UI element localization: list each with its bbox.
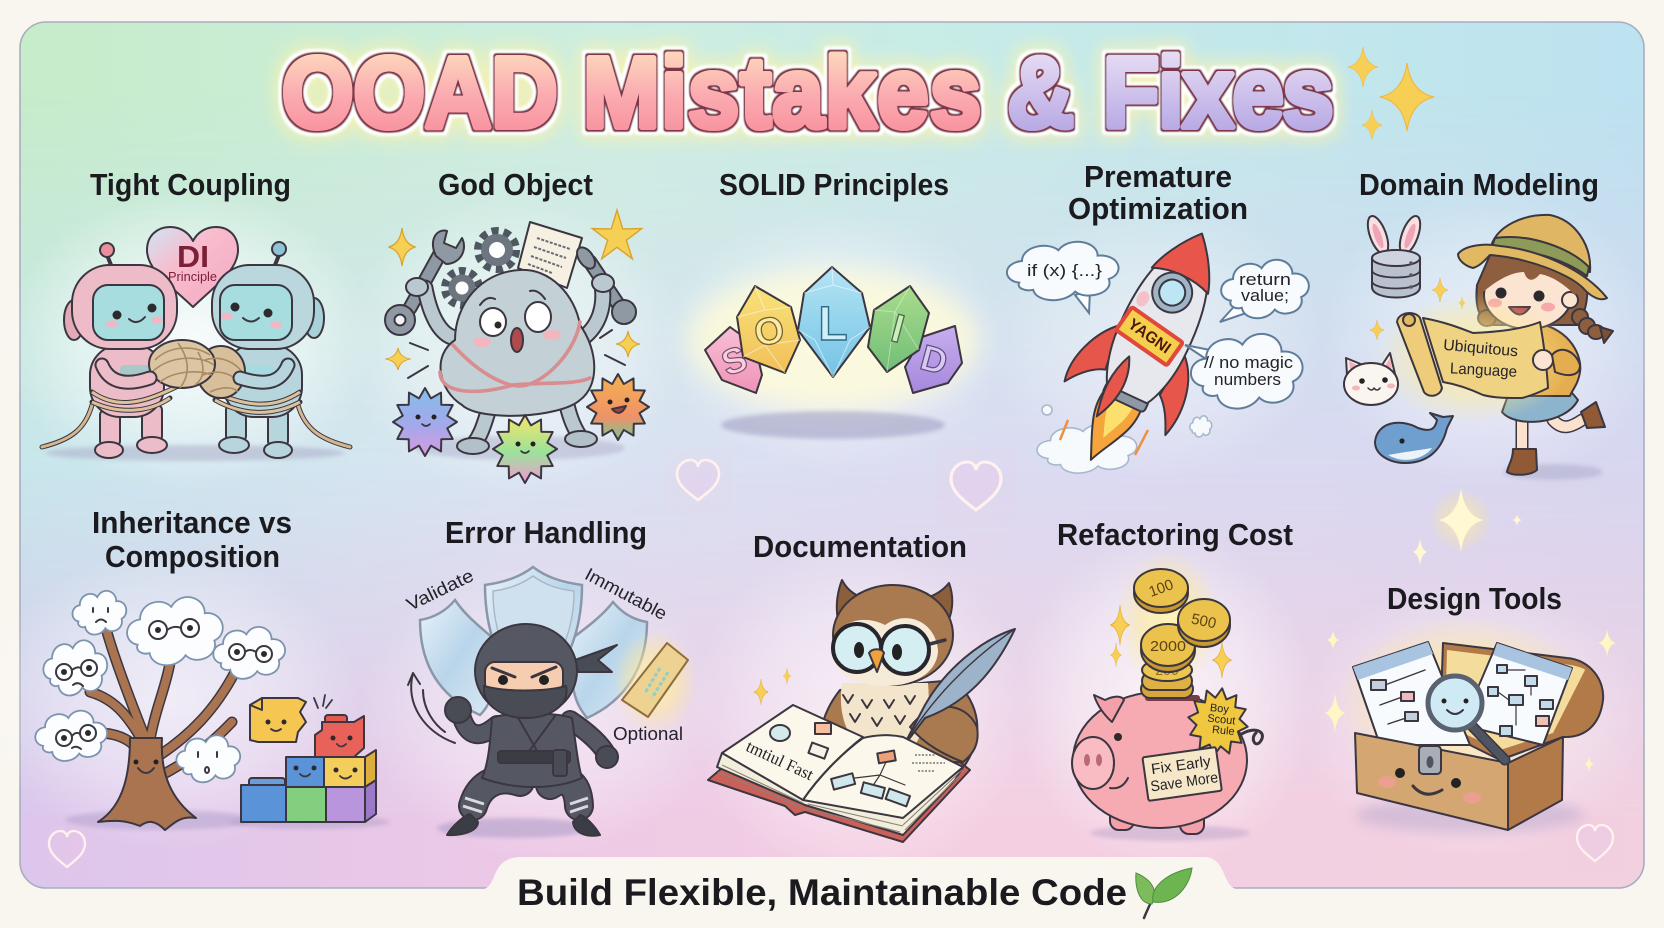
pig body xyxy=(1072,692,1247,834)
left robot legs and torso xyxy=(90,345,167,458)
illustration: tied robots with DI heart xyxy=(42,227,350,461)
jacket xyxy=(1510,325,1580,396)
golden scroll: Ubiquitous Language xyxy=(1375,293,1575,423)
coin 2000: 2000 xyxy=(1150,638,1186,655)
gem S: S xyxy=(716,337,752,384)
illustration: ninja with shields xyxy=(403,564,697,838)
gem O xyxy=(737,286,800,373)
robot arms xyxy=(102,365,288,382)
arms and legs xyxy=(425,285,603,444)
icon: decorative glowing hearts xyxy=(49,460,1613,867)
coin stack: 200 xyxy=(1155,662,1179,678)
coin 500 xyxy=(1178,599,1230,647)
heading: Documentation: Documentation xyxy=(753,529,967,564)
chest face xyxy=(1378,768,1481,804)
ninja head xyxy=(475,624,617,718)
speech cloud: if (x): if (x) {...} xyxy=(1027,261,1102,280)
icon: chest sparkles xyxy=(1325,629,1616,772)
icon: sparkles around scroll xyxy=(1370,278,1465,340)
icon: decorative glowing sparkles xyxy=(1413,488,1522,566)
rainbow monster xyxy=(493,415,557,483)
yellow block xyxy=(250,698,306,742)
chest clasp xyxy=(1419,746,1441,774)
heart with DI Principle: Principle xyxy=(168,269,217,284)
left wrench xyxy=(385,231,464,335)
heart with DI Principle: DI xyxy=(177,239,209,274)
owl wing xyxy=(910,707,978,762)
gem D xyxy=(905,326,962,393)
label: Validate: Validate xyxy=(403,565,477,615)
illustration: owl writing in book xyxy=(708,580,1015,842)
icon: green leaf xyxy=(1136,868,1192,918)
legs and boots xyxy=(1522,420,1582,452)
heading: Domain Modeling: Domain Modeling xyxy=(1359,167,1599,202)
blob body xyxy=(441,270,594,416)
magnifier with face xyxy=(1428,676,1505,760)
speech cloud: return value: value; xyxy=(1241,286,1289,305)
coin 100: 100 xyxy=(1147,576,1176,601)
explorer hat xyxy=(1458,215,1607,299)
coin 2000 xyxy=(1141,624,1195,672)
shields xyxy=(420,567,647,718)
Fix Early Save More label: Fix Early xyxy=(1150,753,1212,778)
gem O: O xyxy=(751,309,788,355)
tail xyxy=(1240,730,1262,744)
icon: book sparkles xyxy=(754,668,791,705)
open book xyxy=(708,705,970,842)
Boy Scout Rule badge: Rule xyxy=(1211,724,1235,738)
right robot legs and torso xyxy=(219,345,302,458)
tree clouds with faces xyxy=(35,591,285,782)
golden scroll: Ubiquitous Language: Ubiquitous xyxy=(1443,337,1519,360)
feather xyxy=(903,629,1015,747)
owl head xyxy=(832,580,953,686)
heading: Inheritance vs Composition xyxy=(92,505,292,574)
middle row blocks xyxy=(286,750,376,787)
gem L: L xyxy=(818,298,848,351)
orange monster xyxy=(587,374,649,440)
icon: cat xyxy=(1344,353,1398,405)
footer text: Build Flexible, Maintainable Code xyxy=(517,872,1127,913)
bottom row blocks xyxy=(241,778,376,822)
illustration: explorer girl with domain scroll xyxy=(1344,213,1613,480)
Fix Early Save More label xyxy=(1142,747,1222,801)
chest box xyxy=(1508,737,1563,830)
skirt xyxy=(1502,388,1578,422)
speech cloud: if (x) xyxy=(1007,242,1119,313)
gem I: I xyxy=(887,306,909,352)
coin 500: 500 xyxy=(1190,611,1218,632)
illustration: SOLID gems xyxy=(688,267,978,439)
heading: Premature Optimization: Optimization xyxy=(1068,191,1248,226)
right wrench xyxy=(573,244,636,324)
scroll glow: Optional xyxy=(613,630,697,734)
heart with DI Principle xyxy=(147,227,238,307)
coin stack xyxy=(1141,659,1193,698)
icon: swoosh arrow xyxy=(408,673,455,743)
ninja legs and feet xyxy=(473,779,579,806)
red block xyxy=(315,715,364,757)
exhaust cloud xyxy=(1037,405,1212,473)
gem D: D xyxy=(916,336,952,383)
icon: right burst star xyxy=(592,210,642,259)
Boy Scout Rule badge: Boy xyxy=(1209,702,1230,716)
heading: Premature Optimization: Premature xyxy=(1084,159,1232,194)
icon: gears xyxy=(445,231,516,305)
owl body xyxy=(820,680,977,765)
Fix Early Save More label: Save More xyxy=(1149,769,1219,795)
open book: tmtiul Fast xyxy=(743,737,817,784)
speech cloud: no magic numbers: // no magic xyxy=(1204,353,1294,372)
face xyxy=(1483,257,1578,329)
heading: SOLID Principles: SOLID Principles xyxy=(719,167,949,202)
rocket body xyxy=(1038,207,1252,486)
heading: God Object: God Object xyxy=(438,167,593,202)
left document xyxy=(1353,642,1470,745)
yarn ball xyxy=(149,340,245,398)
gem S xyxy=(705,327,762,393)
speech cloud: no magic numbers: numbers xyxy=(1214,370,1281,389)
ninja torso and arms xyxy=(462,718,607,755)
speech cloud: return value xyxy=(1220,260,1309,322)
face xyxy=(473,291,561,352)
chest lid back xyxy=(1440,643,1603,760)
illustration: rocket with code clouds xyxy=(1007,207,1309,486)
icon: rabbit ears on database xyxy=(1364,213,1424,298)
label: Immutable: Immutable xyxy=(582,564,670,624)
golden scroll: Ubiquitous Language: Language xyxy=(1450,360,1517,381)
illustration: composition blocks xyxy=(230,695,390,829)
label: Optional: Optional xyxy=(613,724,683,744)
illustration: overloaded God Object xyxy=(385,210,649,483)
Boy Scout Rule badge: Scout xyxy=(1207,713,1236,727)
title: OOAD Mistakes & Fixes xyxy=(282,37,1332,149)
hair back and braids xyxy=(1476,255,1613,343)
icon: paper scroll xyxy=(518,222,582,288)
blue monster xyxy=(393,388,457,456)
heading: Error Handling: Error Handling xyxy=(445,515,647,550)
jacket sleeve xyxy=(1552,350,1580,375)
YAGNI badge xyxy=(1116,307,1183,365)
speech cloud: return value: return xyxy=(1239,270,1291,289)
icon: whale xyxy=(1375,413,1453,463)
icon: yellow stars and bursts xyxy=(385,228,640,370)
footer banner xyxy=(484,857,1236,928)
icon: title sparkles xyxy=(1348,47,1434,140)
heading: Inheritance vs Composition: Composition xyxy=(105,539,280,574)
heading: Inheritance vs Composition: Inheritance vs xyxy=(92,505,292,540)
heading: Premature Optimization xyxy=(1068,159,1248,226)
gem I xyxy=(868,286,929,372)
right document xyxy=(1462,643,1572,745)
YAGNI badge: YAGNI xyxy=(1125,316,1174,357)
coin 100 xyxy=(1134,569,1188,613)
right robot head xyxy=(212,242,324,349)
Boy Scout Rule badge xyxy=(1184,684,1252,760)
left robot head xyxy=(64,243,177,349)
icon: coin sparkles xyxy=(1110,605,1232,678)
speech cloud: no magic numbers xyxy=(1185,334,1303,409)
heading: Tight Coupling: Tight Coupling xyxy=(90,167,291,202)
illustration: toolbox chest xyxy=(1325,615,1616,833)
heading: Refactoring Cost: Refactoring Cost xyxy=(1057,517,1293,552)
illustration: inheritance tree xyxy=(35,591,285,830)
gem L xyxy=(798,267,870,377)
illustration: piggy bank with coins xyxy=(1072,550,1262,841)
heading: Design Tools: Design Tools xyxy=(1387,581,1562,616)
